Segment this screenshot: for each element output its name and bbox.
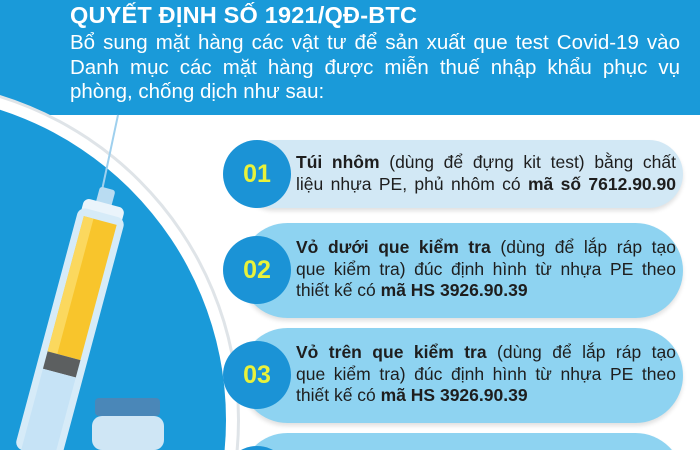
- icon: syringe: [13, 115, 132, 450]
- item 02: [223, 223, 684, 322]
- icon: vial: [92, 398, 164, 450]
- item 02: Vỏ dưới que kiểm tra (dùng để lắp ráp tạo: [296, 237, 676, 257]
- item 01: Túi nhôm (dùng để đựng kit test) bằng chất: [296, 152, 676, 172]
- item 04 (partial): [241, 433, 672, 450]
- item 01: liệu nhựa PE, phủ nhôm có mã số 7612.90.90: [296, 174, 676, 194]
- subtitle text: phòng, chống dịch như sau:: [70, 80, 324, 103]
- item 03: [223, 328, 684, 427]
- item 03: thiết kế có mã HS 3926.90.39: [296, 385, 528, 405]
- item 03: que kiểm tra) đúc định hình từ nhựa PE theo: [296, 364, 676, 384]
- item 02: 02: [243, 256, 271, 284]
- item 03: 03: [243, 361, 271, 389]
- item 01: [223, 140, 684, 212]
- item 03: Vỏ trên que kiểm tra (dùng để lắp ráp tạo: [296, 342, 676, 362]
- item 02: thiết kế có mã HS 3926.90.39: [296, 280, 528, 300]
- subtitle text: Bổ sung mặt hàng các vật tư để sản xuất que test Covid-19 vào: [70, 31, 680, 54]
- item 02: que kiểm tra) đúc định hình từ nhựa PE theo: [296, 258, 676, 278]
- item 01: 01: [243, 160, 271, 188]
- subtitle text: [70, 31, 680, 103]
- title: QUYẾT ĐỊNH SỐ 1921/QĐ-BTC: [70, 2, 417, 28]
- subtitle text: Danh mục các mặt hàng được miễn thuế nhập khẩu phục vụ: [70, 56, 680, 78]
